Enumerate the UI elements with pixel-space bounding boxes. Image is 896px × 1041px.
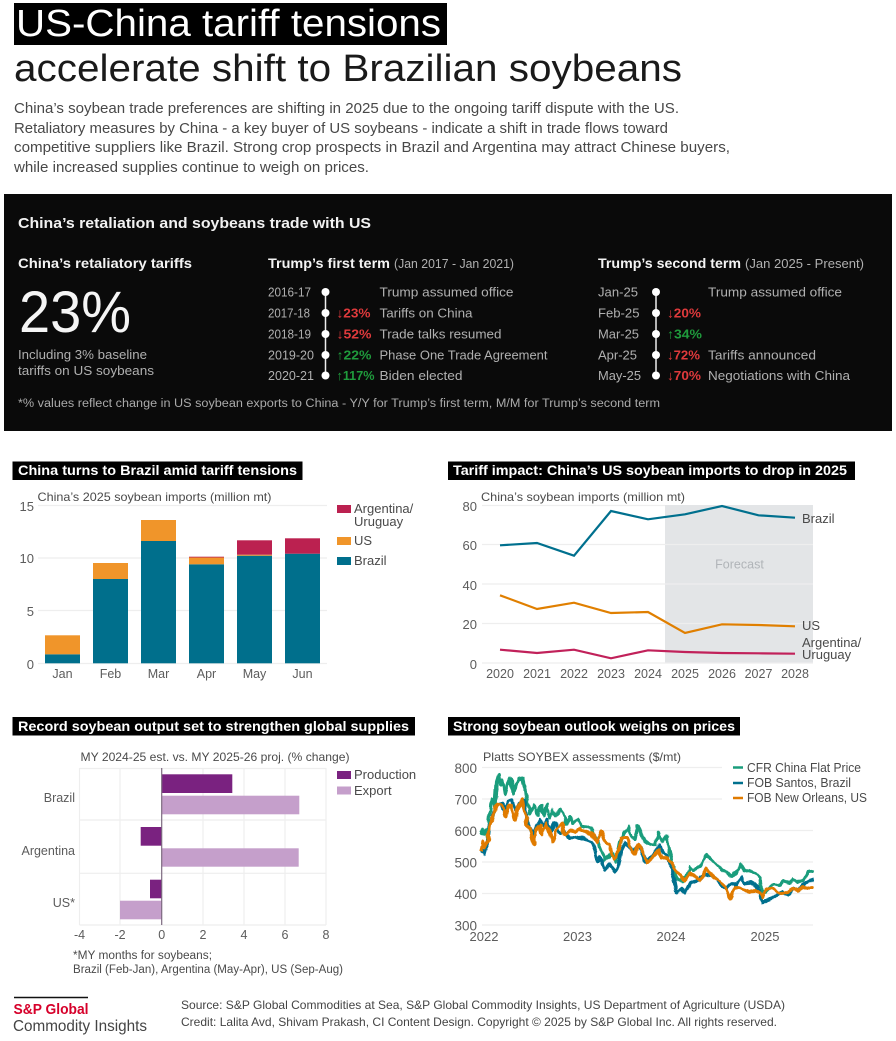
panel: Tariff impact <box>448 462 862 681</box>
line chart: 2027 <box>745 667 772 681</box>
timeline: Trump's second term: ↓70% <box>667 368 701 383</box>
timeline: Trump's second term: (Jan 2025 - Present) <box>745 256 864 271</box>
timeline: Trump's first term: 2016-17 <box>268 284 311 300</box>
price line chart: 700 <box>454 792 477 808</box>
heading: Tariff impact: China’s US soybean imports to drop in 2025 <box>453 462 847 478</box>
timeline: Trump's first term: Trump’s first term <box>268 255 390 271</box>
heading: Strong soybean outlook weighs on prices <box>453 718 735 734</box>
heading: Record soybean output set to strengthen global supplies <box>18 718 409 734</box>
timeline: Trump's second term: May-25 <box>598 368 641 383</box>
logo: S&P Global Commodity Insights: S&P Global <box>14 1001 88 1018</box>
timeline: Trump's first term: ↑117% <box>336 368 375 383</box>
legend <box>337 767 416 798</box>
retaliatory tariffs block: 23% <box>19 280 131 345</box>
price line chart: 600 <box>454 824 477 839</box>
stacked bar chart: Feb <box>100 667 121 681</box>
panel: China turns to Brazil <box>12 462 414 681</box>
legend: FOB New Orleans, US <box>747 791 867 805</box>
timeline: Trump's first term: Tariffs on China <box>380 306 473 320</box>
price line chart: 2025 <box>751 929 779 944</box>
price line chart: 800 <box>454 761 477 776</box>
price line chart: 2023 <box>563 929 592 944</box>
horizontal bar chart: 2 <box>200 928 207 942</box>
horizontal bar chart: -2 <box>114 928 126 942</box>
legend: Export <box>354 783 392 798</box>
horizontal bar chart: 0 <box>158 928 165 942</box>
chart subtitle: China’s 2025 soybean imports (million mt) <box>38 490 272 504</box>
price line chart: 500 <box>454 856 477 870</box>
stacked bar chart: May <box>243 667 267 681</box>
timeline: Trump's first term: 2019-20 <box>268 348 314 362</box>
stacked bar chart: Apr <box>197 667 216 681</box>
line chart: 80 <box>463 499 477 514</box>
timeline: Trump's second term: ↓72% <box>667 348 700 362</box>
line chart: 2023 <box>597 667 625 681</box>
title <box>14 3 682 90</box>
retaliatory tariffs block: China’s retaliatory tariffs <box>18 255 192 271</box>
intro text: while increased supplies continue to weigh on prices. <box>13 159 369 176</box>
intro text: competitive suppliers like Brazil. Strong crop prospects in Brazil and Argentina may attract Chinese buyers, <box>14 139 730 156</box>
panel heading: China’s retaliation and soybeans trade with US <box>18 215 371 232</box>
logo: S&P Global Commodity Insights <box>13 998 147 1035</box>
stacked bar chart: Jun <box>292 667 313 681</box>
panel: Strong soybean outlook <box>448 717 867 944</box>
line chart: 2021 <box>523 667 551 681</box>
timeline: Trump's second term: Trump assumed office <box>708 284 842 300</box>
legend: Argentina/ <box>354 501 414 516</box>
price line chart: 2022 <box>470 929 498 944</box>
line chart: 2022 <box>560 667 588 681</box>
timeline: Trump's second term <box>598 255 864 383</box>
horizontal bar chart: Brazil <box>44 791 75 805</box>
source and credit: Credit: Lalita Avd, Shivam Prakash, CI Content Design. Copyright © 2025 by S&P Global Inc. All rights reserved. <box>181 1015 777 1029</box>
stacked bar chart: 5 <box>27 604 34 619</box>
stacked bar chart: Mar <box>148 667 169 681</box>
timeline: Trump's first term: Biden elected <box>380 368 462 383</box>
legend: CFR China Flat Price <box>747 761 861 775</box>
timeline: Trump's second term: Negotiations with China <box>708 368 851 383</box>
source and credit <box>181 998 785 1029</box>
chart subtitle: MY 2024-25 est. vs. MY 2025-26 proj. (% change) <box>80 750 350 764</box>
title: accelerate shift to Brazilian soybeans <box>14 48 682 90</box>
timeline: Trump's first term: 2018-19 <box>268 326 311 342</box>
chart subtitle: China’s soybean imports (million mt) <box>481 490 685 504</box>
horizontal bar chart: -4 <box>74 928 85 942</box>
horizontal bar chart <box>21 768 330 942</box>
timeline: Trump's first term: Trade talks resumed <box>380 326 502 342</box>
stacked bar chart: 10 <box>20 551 34 566</box>
stacked bar chart: 15 <box>20 499 34 514</box>
intro text: Retaliatory measures by China - a key buyer of US soybeans - indicate a shift in trade flows toward <box>14 120 668 137</box>
line chart: 60 <box>463 538 477 553</box>
panel: China's retaliation and soybeans trade <box>4 194 892 431</box>
line chart: Argentina/ <box>802 635 862 650</box>
footnote <box>73 950 343 976</box>
horizontal bar chart: 4 <box>241 928 248 942</box>
line chart: 2020 <box>486 667 514 681</box>
legend: Uruguay <box>354 514 404 529</box>
retaliatory tariffs block <box>18 255 192 378</box>
timeline: Trump's first term: 2017-18 <box>268 306 310 320</box>
stacked bar chart: 0 <box>27 657 34 672</box>
timeline: Trump's second term: ↓20% <box>667 306 701 320</box>
line chart: Forecast <box>715 558 764 572</box>
timeline: Trump's second term: Mar-25 <box>598 326 639 342</box>
footnote: Brazil (Feb-Jan), Argentina (May-Apr), US (Sep-Aug) <box>73 964 343 976</box>
intro text <box>13 100 730 176</box>
legend: US <box>354 533 372 548</box>
retaliatory tariffs block: tariffs on US soybeans <box>18 363 155 378</box>
price line chart: 400 <box>454 887 477 902</box>
line chart: Brazil <box>802 511 835 526</box>
timeline: Trump's second term: Feb-25 <box>598 306 640 320</box>
timeline: Trump's first term <box>268 255 548 383</box>
timeline: Trump's second term: Apr-25 <box>598 348 637 362</box>
timeline: Trump's first term: 2020-21 <box>268 368 314 383</box>
line chart: 40 <box>463 578 477 593</box>
stacked bar chart: Jan <box>52 667 73 681</box>
horizontal bar chart: US* <box>53 896 75 910</box>
chart subtitle: Platts SOYBEX assessments ($/mt) <box>483 750 681 764</box>
timeline: Trump's second term: Tariffs announced <box>708 348 816 362</box>
intro text: China’s soybean trade preferences are shifting in 2025 due to the ongoing tariff dispute with the US. <box>14 100 679 117</box>
source and credit: Source: S&P Global Commodities at Sea, S&P Global Commodity Insights, US Department of Agriculture (USDA) <box>181 998 785 1012</box>
timeline: Trump's first term: ↑22% <box>336 348 372 362</box>
legend: Production <box>354 767 416 782</box>
timeline: Trump's first term: (Jan 2017 - Jan 2021) <box>394 256 514 271</box>
timeline: Trump's second term: ↑34% <box>667 326 702 342</box>
line chart: 2028 <box>781 667 809 681</box>
timeline: Trump's first term: Phase One Trade Agreement <box>380 348 548 362</box>
retaliatory tariffs block: Including 3% baseline <box>18 347 147 362</box>
horizontal bar chart: 6 <box>282 928 289 942</box>
heading: China turns to Brazil amid tariff tensions <box>18 462 297 478</box>
price line chart: 2024 <box>657 929 685 944</box>
line chart: 2024 <box>634 667 662 681</box>
line chart: Uruguay <box>802 647 852 662</box>
footnote: *MY months for soybeans; <box>73 950 212 962</box>
panel: Record soybean output <box>12 717 416 976</box>
line chart: 2026 <box>708 667 736 681</box>
line chart: 0 <box>470 657 477 672</box>
legend: FOB Santos, Brazil <box>747 776 851 790</box>
legend <box>733 761 867 805</box>
horizontal bar chart: 8 <box>323 928 330 942</box>
line chart: 2025 <box>671 667 699 681</box>
timeline: Trump's second term: Trump’s second term <box>598 255 741 271</box>
price line chart <box>454 761 813 944</box>
line chart <box>463 499 862 681</box>
timeline: Trump's first term: ↓52% <box>336 326 372 342</box>
price line chart: 300 <box>454 918 477 934</box>
timeline: Trump's first term: Trump assumed office <box>380 284 514 300</box>
line chart: 20 <box>463 617 477 632</box>
timeline: Trump's second term: Jan-25 <box>598 284 638 300</box>
line chart: US <box>802 618 820 633</box>
timeline: Trump's first term: ↓23% <box>336 306 371 320</box>
title: US-China tariff tensions <box>16 3 441 45</box>
horizontal bar chart: Argentina <box>21 844 75 858</box>
panel footnote: *% values reflect change in US soybean exports to China - Y/Y for Trump’s first term, M/M for Trump’s second term <box>18 398 660 410</box>
legend: Brazil <box>354 553 387 568</box>
stacked bar chart <box>20 499 327 681</box>
legend <box>337 501 414 568</box>
logo: S&P Global Commodity Insights: Commodity Insights <box>13 1018 147 1035</box>
